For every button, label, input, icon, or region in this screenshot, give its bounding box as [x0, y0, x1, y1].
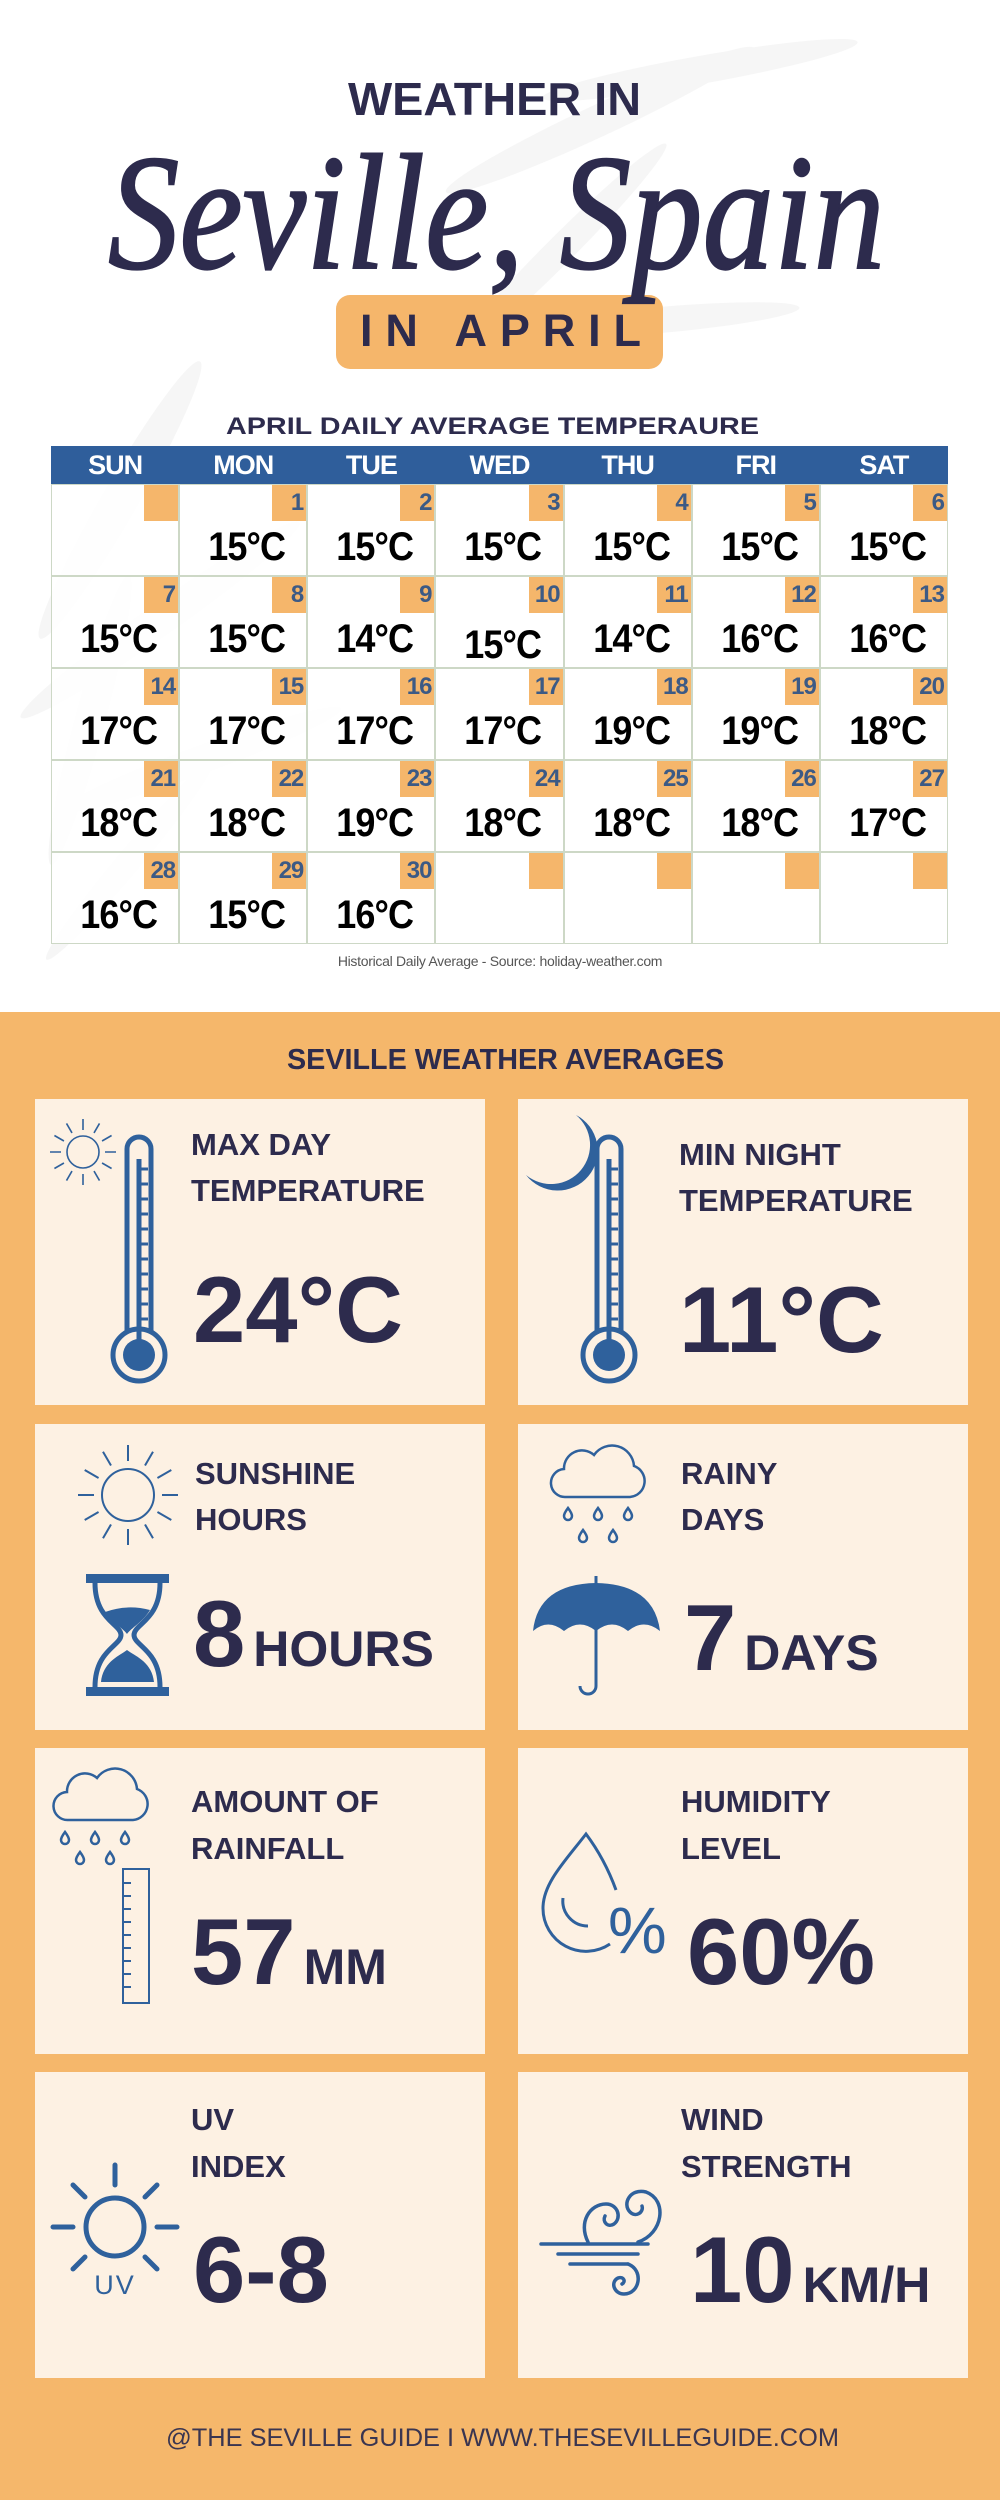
icon: sun [50, 1119, 116, 1185]
calendar header row: THU [601, 450, 654, 480]
label: WIND [681, 2102, 764, 2137]
icon: hourglass [86, 1574, 169, 1696]
calendar header row: SUN [88, 450, 142, 480]
label: MIN NIGHT [679, 1137, 841, 1172]
calendar grid: 23 [407, 765, 431, 792]
value: 6-8 [193, 2217, 329, 2322]
card: humidity level: % [608, 1893, 667, 1967]
calendar grid: 15°C [465, 525, 542, 569]
calendar grid: 25 [663, 765, 688, 792]
value: 11°C [679, 1267, 884, 1372]
value: 8HOURS [193, 1581, 434, 1686]
calendar grid: 9 [419, 581, 431, 608]
icon: rain cloud [551, 1446, 645, 1542]
value: 24°C [193, 1257, 403, 1362]
calendar grid: 6 [932, 489, 944, 516]
card: wind strength [518, 2072, 968, 2378]
card: rainy days [518, 1424, 968, 1730]
card: humidity level [518, 1748, 968, 2054]
calendar grid: 15°C [849, 525, 926, 569]
calendar grid: 15 [279, 673, 303, 700]
title block [108, 73, 885, 440]
calendar grid: 8 [291, 581, 303, 608]
title: weather in: WEATHER IN [348, 73, 641, 125]
calendar grid: 7 [163, 581, 175, 608]
icon: moon [526, 1115, 598, 1191]
calendar grid: 15°C [465, 623, 542, 667]
pill: in april: IN APRIL [360, 305, 641, 356]
value: 57MM [191, 1899, 387, 2004]
calendar header row: FRI [736, 450, 776, 480]
value: 10KM/H [690, 2217, 930, 2322]
calendar grid: 2 [419, 489, 431, 516]
calendar header row: WED [469, 450, 529, 480]
label: RAINFALL [191, 1831, 344, 1866]
label: HUMIDITY [681, 1784, 831, 1819]
icon: humidity drop [543, 1834, 616, 1951]
calendar grid: 19°C [721, 709, 798, 753]
calendar grid: 18°C [849, 709, 926, 753]
icon: wind [541, 2191, 660, 2294]
calendar grid: 19 [791, 673, 816, 700]
icon: cloud with ruler [53, 1769, 149, 2003]
label: LEVEL [681, 1831, 781, 1866]
calendar grid: 12 [791, 581, 816, 608]
section heading: SEVILLE WEATHER AVERAGES [287, 1044, 724, 1076]
label: RAINY [681, 1456, 778, 1491]
panel: averages section [0, 1012, 1000, 2500]
calendar grid: 15°C [337, 525, 413, 569]
calendar grid: 11 [664, 581, 688, 608]
calendar grid: 4 [675, 489, 688, 516]
calendar grid: 17°C [80, 709, 157, 753]
label: UV [191, 2102, 234, 2137]
value: 60% [687, 1899, 875, 2004]
icon: thermometer [583, 1137, 635, 1381]
icon: uv sun [53, 2165, 177, 2269]
card: amount of rainfall [35, 1748, 485, 2054]
calendar grid: 1 [291, 489, 303, 516]
calendar grid: 22 [279, 765, 303, 792]
calendar grid: 15°C [208, 893, 285, 937]
calendar grid: 15°C [721, 525, 798, 569]
value: 7DAYS [684, 1585, 879, 1690]
calendar grid: 14 [150, 673, 175, 700]
label: DAYS [681, 1502, 764, 1537]
label: TEMPERATURE [191, 1173, 425, 1208]
calendar grid: 18°C [80, 801, 157, 845]
calendar grid: 5 [803, 489, 816, 516]
label: STRENGTH [681, 2149, 852, 2184]
calendar grid: 16 [407, 673, 431, 700]
calendar grid: 3 [547, 489, 560, 516]
calendar grid: 15°C [593, 525, 670, 569]
label: TEMPERATURE [679, 1183, 913, 1218]
calendar grid: 15°C [208, 525, 285, 569]
source note: Historical Daily Average - Source: holiday-weather.com [338, 953, 662, 969]
label: MAX DAY [191, 1127, 331, 1162]
calendar header row: SAT [859, 450, 908, 480]
label: HOURS [195, 1502, 307, 1537]
calendar header row: TUE [346, 450, 397, 480]
calendar grid: 10 [535, 581, 560, 608]
calendar grid: 13 [919, 581, 944, 608]
calendar grid: 18°C [593, 801, 670, 845]
pill: in april [336, 295, 663, 369]
footer: @THE SEVILLE GUIDE I WWW.THESEVILLEGUIDE.COM [166, 2424, 839, 2452]
calendar grid: 19°C [593, 709, 670, 753]
calendar grid: 17°C [208, 709, 285, 753]
card: max day temperature [35, 1099, 485, 1405]
calendar grid: 16°C [80, 893, 157, 937]
card: uv index: UV [94, 2270, 136, 2300]
card: min night temperature [518, 1099, 968, 1405]
calendar grid: 17°C [337, 709, 413, 753]
label: INDEX [191, 2149, 286, 2184]
calendar grid: 15°C [208, 617, 285, 661]
calendar grid: 19°C [337, 801, 413, 845]
calendar grid: 17°C [465, 709, 542, 753]
calendar grid: 14°C [593, 617, 670, 661]
calendar header row: MON [213, 450, 273, 480]
title: script city: Seville, Spain [108, 121, 885, 304]
calendar grid: 21 [150, 765, 175, 792]
calendar grid: 16°C [337, 893, 413, 937]
label: AMOUNT OF [191, 1784, 379, 1819]
calendar grid: 17 [535, 673, 560, 700]
label: SUNSHINE [195, 1456, 355, 1491]
calendar heading: APRIL DAILY AVERAGE TEMPERAURE [226, 413, 759, 440]
icon: thermometer [113, 1137, 165, 1381]
icon: sun [78, 1445, 178, 1545]
calendar grid: 26 [791, 765, 816, 792]
icon: umbrella [533, 1576, 660, 1694]
calendar grid: 29 [279, 857, 303, 884]
calendar grid: 17°C [849, 801, 926, 845]
calendar grid: 14°C [337, 617, 413, 661]
calendar grid: 20 [919, 673, 944, 700]
calendar header row [51, 446, 948, 484]
background palm watermark [20, 39, 858, 960]
calendar grid: 15°C [80, 617, 157, 661]
calendar grid [51, 484, 948, 944]
calendar grid: 16°C [849, 617, 926, 661]
calendar grid: 16°C [721, 617, 798, 661]
card: sunshine hours [35, 1424, 485, 1730]
calendar grid: 18°C [465, 801, 542, 845]
calendar grid: 18 [663, 673, 688, 700]
calendar grid: 24 [535, 765, 560, 792]
card: uv index [35, 2072, 485, 2378]
calendar grid: 27 [919, 765, 944, 792]
calendar grid: 30 [407, 857, 431, 884]
calendar grid: 18°C [721, 801, 798, 845]
calendar grid: 18°C [208, 801, 285, 845]
calendar grid: 28 [150, 857, 175, 884]
